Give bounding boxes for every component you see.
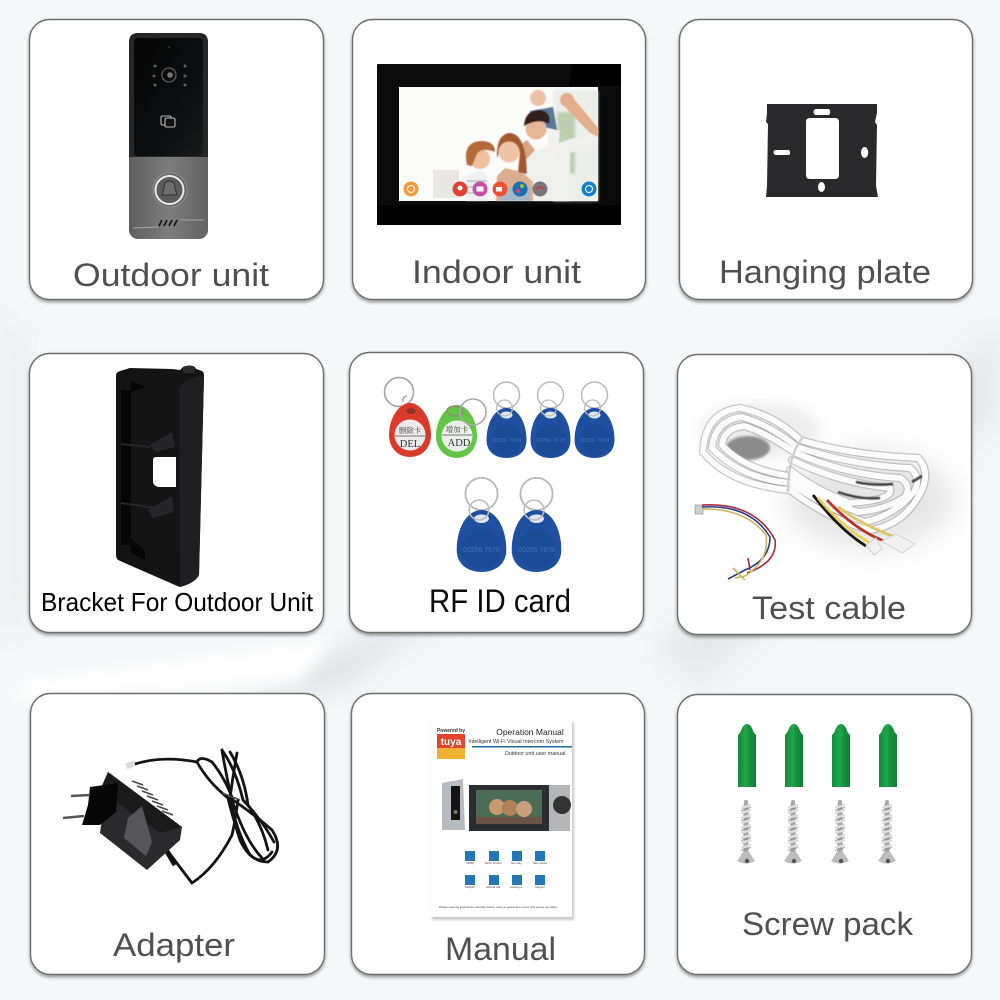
icon: coiled white cable [695,402,955,580]
icon: green ADD key fob: 增加卡 [446,424,469,434]
icon: operation manual booklet: Take photos [532,861,548,865]
icon: green ADD key fob [436,399,486,458]
icon: screws [737,800,896,864]
panel: screw pack [678,694,972,974]
icon: operation manual booklet: Internal call [486,885,501,889]
icon: indoor monitor [377,64,621,225]
icon: red DEL key fob: 删除卡 [399,425,422,435]
icon: operation manual booklet: Please read the instructions carefully before using to guarantee correct and proper operation [439,905,558,909]
icon: power adapter [63,750,278,883]
icon: red DEL key fob: DEL [400,439,420,450]
icon: green ADD key fob: ADD [448,438,471,449]
panel: outdoor unit [30,20,324,300]
icon: operation manual booklet: Multiple [465,885,475,889]
icon: operation manual booklet: Intelligent Wi-Fi Visual Intercom System [468,739,564,745]
panel: adapter [30,694,324,974]
family photo [466,90,598,201]
icon: operation manual booklet: Operation Manual [496,727,564,737]
icon: operation manual booklet: Two way [511,861,522,865]
label: adapter: Adapter [113,927,235,963]
icon: outdoor door station [129,33,208,239]
icon: mounting plate [766,104,878,197]
label: manual: Manual [445,931,556,967]
label: bracket for outdoor unit: Bracket For Outdoor Unit [41,587,314,617]
panel: hanging plate [680,20,972,300]
label: indoor unit: Indoor unit [412,254,581,290]
icon: green wall anchors [738,724,897,787]
panel: bracket [30,354,324,632]
panel: test cable [678,354,972,634]
panel: manual [352,694,644,974]
icon: operation manual booklet: Support [535,885,545,889]
icon: operation manual booklet: Outdoor unit user manual [505,751,565,757]
icon: operation manual booklet: Touch Screen [484,861,502,865]
app icons [404,182,596,196]
label: outdoor unit: Outdoor unit [73,257,269,293]
label: rf id card: RF ID card [429,583,571,619]
label: hanging plate: Hanging plate [719,254,931,290]
icon: red DEL key fob [384,378,431,457]
icon: operation manual booklet: 1080p [466,861,474,865]
label: test cable: Test cable [752,590,906,626]
icon: operation manual booklet: Leaving a [510,885,523,889]
panel: rf id cards [350,352,644,632]
label: screw pack: Screw pack [742,906,914,942]
icon: operation manual booklet: Powered by [437,728,465,734]
panel: indoor unit [352,20,646,300]
icon: black wedge bracket [116,366,204,587]
icon: operation manual booklet [431,720,574,920]
icon: operation manual booklet: tuya [441,737,462,748]
icon: blue key fobs [457,382,614,572]
